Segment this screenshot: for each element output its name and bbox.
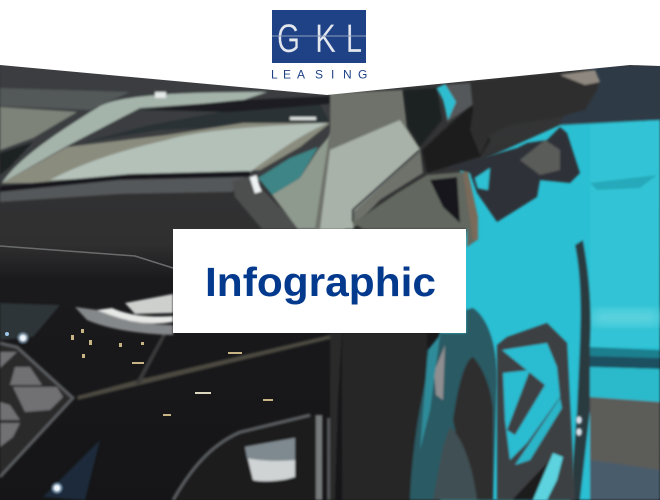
logo letters: G — [277, 17, 300, 61]
logo subtitle: LEASING — [271, 68, 367, 82]
door reflection of teal car — [497, 323, 582, 500]
left hood crease line — [0, 246, 173, 268]
windshield of black car — [315, 90, 423, 229]
black car front: grille and headlights — [0, 294, 342, 500]
wheel arch and tyre — [342, 308, 497, 500]
logo: GKL Leasing — [271, 10, 367, 82]
logo letters: K — [315, 17, 336, 61]
black car hood reflections — [0, 62, 345, 229]
title card — [173, 229, 466, 333]
logo box — [272, 10, 366, 63]
white header band with chevron edge — [0, 0, 660, 95]
teal car body — [440, 66, 660, 500]
mirrors and door shadow — [353, 70, 600, 247]
logo letters: L — [346, 17, 362, 61]
title: Infographic — [205, 259, 436, 305]
logo letters — [277, 17, 362, 61]
